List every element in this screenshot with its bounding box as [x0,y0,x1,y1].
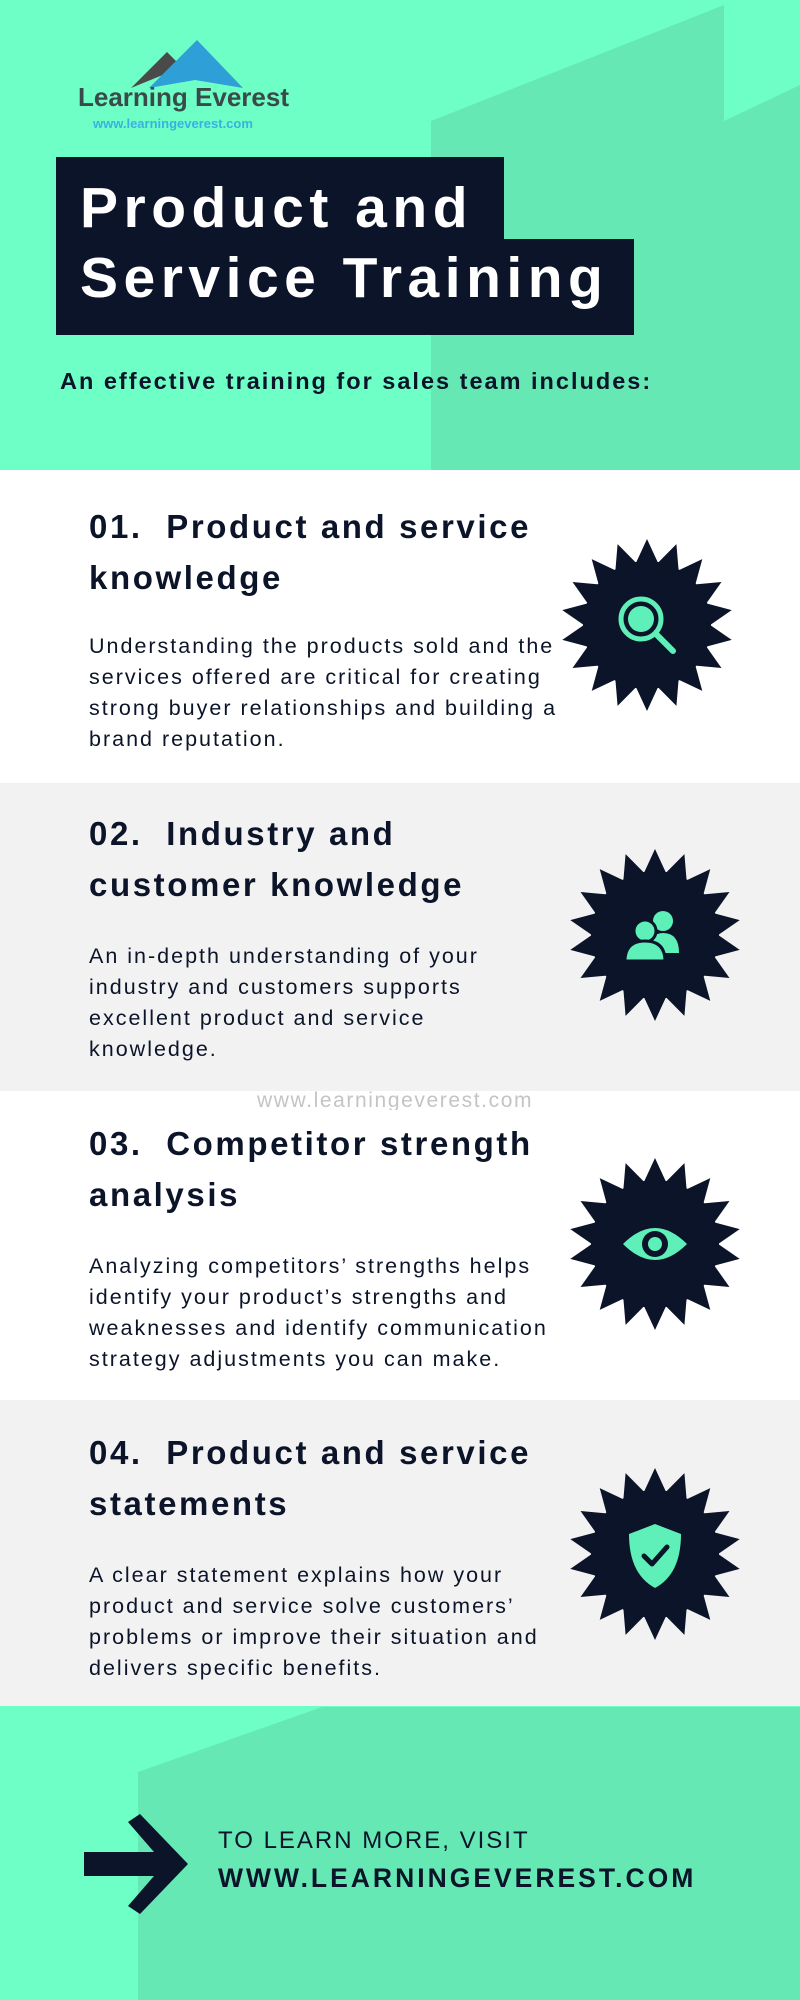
panel: 02: customer knowledge [89,866,464,903]
subtitle: An effective training for sales team includes: [60,368,652,394]
panel: 03: strategy adjustments you can make. [89,1347,501,1371]
panel: 03: 03. Competitor strength [89,1125,533,1162]
panel: 01: 01. Product and service [89,508,531,545]
call to action: TO LEARN MORE, VISIT [218,1827,530,1854]
panel: 04 [0,1400,800,1706]
panel: 03: identify your product’s strengths and [89,1285,508,1309]
panel: 02 [0,783,800,1091]
panel: 01: services offered are critical for creating [89,665,542,689]
panel: 02: industry and customers supports [89,975,462,999]
panel: 04: product and service solve customers’ [89,1594,515,1618]
title [56,157,634,335]
panel: 01: brand reputation. [89,727,286,751]
logo: www.learningeverest.com [93,116,253,131]
panel: 01: knowledge [89,559,283,596]
title: Product and [80,176,473,240]
logo: Learning Everest [78,82,289,112]
panel: 04: delivers specific benefits. [89,1656,382,1680]
icon: eye [570,1158,740,1330]
panel: 01: strong buyer relationships and building a [89,696,557,720]
panel: 04: A clear statement explains how your [89,1563,503,1587]
icon: shield [570,1468,740,1640]
panel: 02: 02. Industry and [89,815,395,852]
arrow [84,1814,188,1914]
icon: search [562,539,732,711]
panel: 01: Understanding the products sold and the [89,634,554,658]
panel: 01 [0,470,800,783]
panel: 02: knowledge. [89,1037,218,1061]
panel: 03: analysis [89,1176,240,1213]
panel: 04: problems or improve their situation and [89,1625,539,1649]
title: Service Training [80,246,608,310]
icon: people [570,849,740,1021]
logo [78,40,289,131]
panel: 04: statements [89,1485,289,1522]
footer [0,1706,800,2000]
panel: 02: An in-depth understanding of your [89,944,479,968]
panel: 02: excellent product and service [89,1006,425,1030]
panel: 04: 04. Product and service [89,1434,531,1471]
panel: 03: weaknesses and identify communication [89,1316,548,1340]
header background [0,0,800,470]
panel: 03 [0,1110,800,1400]
watermark: www.learningeverest.com [257,1089,533,1112]
call to action [218,1827,696,1893]
call to action: WWW.LEARNINGEVEREST.COM [218,1863,696,1893]
panel: 03: Analyzing competitors’ strengths helps [89,1254,531,1278]
